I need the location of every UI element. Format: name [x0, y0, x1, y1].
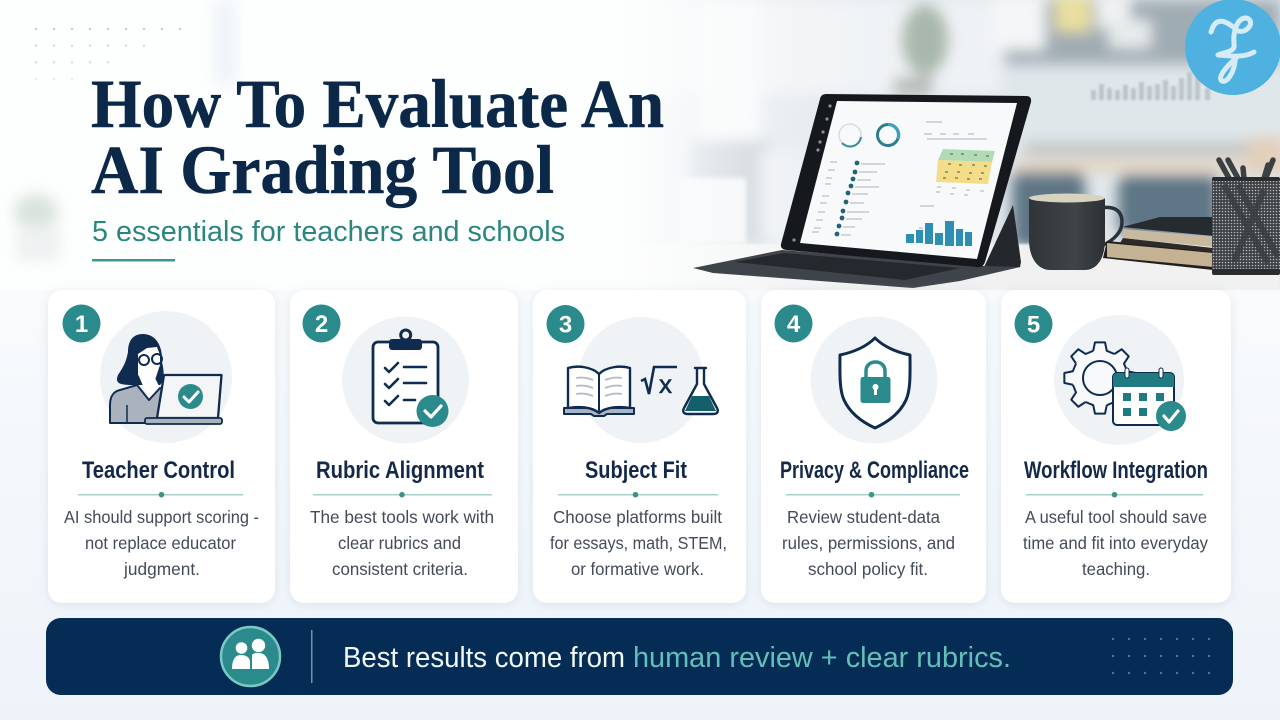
number badge 2 [302, 304, 340, 342]
body text: consistent criteria. [332, 559, 468, 579]
icon background circle [578, 317, 704, 443]
number badge 2: 2 [315, 311, 328, 338]
title: How To Evaluate An [91, 66, 664, 142]
heading: Subject Fit [585, 457, 687, 484]
icon background circle [810, 316, 938, 444]
dashboard donuts [839, 124, 899, 147]
callout text [343, 642, 1011, 674]
body text [64, 507, 259, 579]
icon: gear [1064, 342, 1136, 414]
heading: Rubric Alignment [316, 457, 484, 484]
body text: for essays, math, STEM, [550, 533, 727, 553]
coffee mug [1029, 194, 1122, 270]
decorative dot grid [33, 26, 181, 94]
body text: teaching. [1082, 559, 1150, 579]
body text: judgment. [123, 559, 200, 579]
number badge 5 [1014, 305, 1052, 343]
panel: subject fit [533, 290, 746, 603]
tablet stand and keyboard [693, 205, 1021, 288]
body text: Review student-data [787, 507, 940, 527]
number badge 4: 4 [787, 311, 801, 338]
body text: AI should support scoring - [64, 507, 259, 527]
panel: teacher control [48, 290, 275, 603]
subtitle underline [92, 259, 175, 262]
bar chart [906, 221, 972, 246]
callout text: human review + clear rubrics. [633, 642, 1011, 674]
number badge 1 [62, 304, 100, 342]
icon: clipboard checklist [373, 330, 448, 427]
callout text: Best results come from [343, 642, 625, 674]
bezel icons [792, 104, 832, 242]
icon background circle [1054, 315, 1184, 445]
body text: The best tools work with [310, 507, 494, 527]
dashboard list [835, 161, 859, 236]
callout banner [46, 618, 1233, 695]
divider [313, 492, 492, 498]
tablet [781, 94, 1031, 267]
body text [550, 507, 727, 579]
number badge 1: 1 [75, 311, 88, 338]
number badge 4 [774, 304, 812, 342]
divider [558, 492, 718, 498]
heading: Privacy & Compliance [780, 457, 969, 484]
icon: people [221, 627, 280, 686]
icon: teacher at laptop [110, 334, 222, 424]
pen holder [1212, 160, 1280, 275]
body text: not replace educator [85, 533, 236, 553]
icon: open book [564, 367, 634, 416]
icon: calendar with check [1113, 368, 1186, 431]
logo badge [1185, 0, 1280, 95]
icon: flask [683, 368, 718, 414]
body text: rules, permissions, and [782, 533, 955, 553]
icon: square root of x [641, 367, 677, 399]
ghost bars on the wall [1091, 72, 1210, 100]
divider [78, 492, 243, 498]
body text: time and fit into everyday [1023, 533, 1208, 553]
divider [1026, 492, 1203, 498]
icon background circle [342, 316, 469, 444]
number badge 3: 3 [559, 312, 572, 338]
subtitle: 5 essentials for teachers and schools [92, 216, 565, 248]
body text [310, 507, 494, 579]
icon background circle [100, 311, 232, 443]
icon: shield with padlock [840, 338, 910, 428]
panel: workflow integration [1001, 290, 1231, 603]
heatmap table [938, 149, 995, 162]
number badge 3 [546, 305, 584, 343]
number badge 5: 5 [1027, 312, 1040, 338]
heading: Teacher Control [82, 457, 235, 484]
title: AI Grading Tool [91, 132, 554, 208]
body text: A useful tool should save [1025, 507, 1207, 527]
divider [786, 492, 960, 498]
body text: school policy fit. [808, 559, 928, 579]
icon: square root of x: x [659, 369, 672, 399]
stacked books [1103, 217, 1213, 270]
body text [782, 507, 955, 579]
body text [1023, 507, 1208, 579]
body text: clear rubrics and [338, 533, 461, 553]
panel: privacy and compliance [761, 290, 986, 603]
divider line [311, 630, 312, 683]
body text: or formative work. [571, 559, 704, 579]
panel: rubric alignment [290, 290, 518, 603]
title [91, 66, 664, 208]
photo: tablet on desk with mug, books and pen holder [693, 94, 1280, 288]
heading: Workflow Integration [1024, 457, 1208, 484]
decorative dot grid [1110, 636, 1212, 687]
body text: Choose platforms built [553, 507, 722, 527]
